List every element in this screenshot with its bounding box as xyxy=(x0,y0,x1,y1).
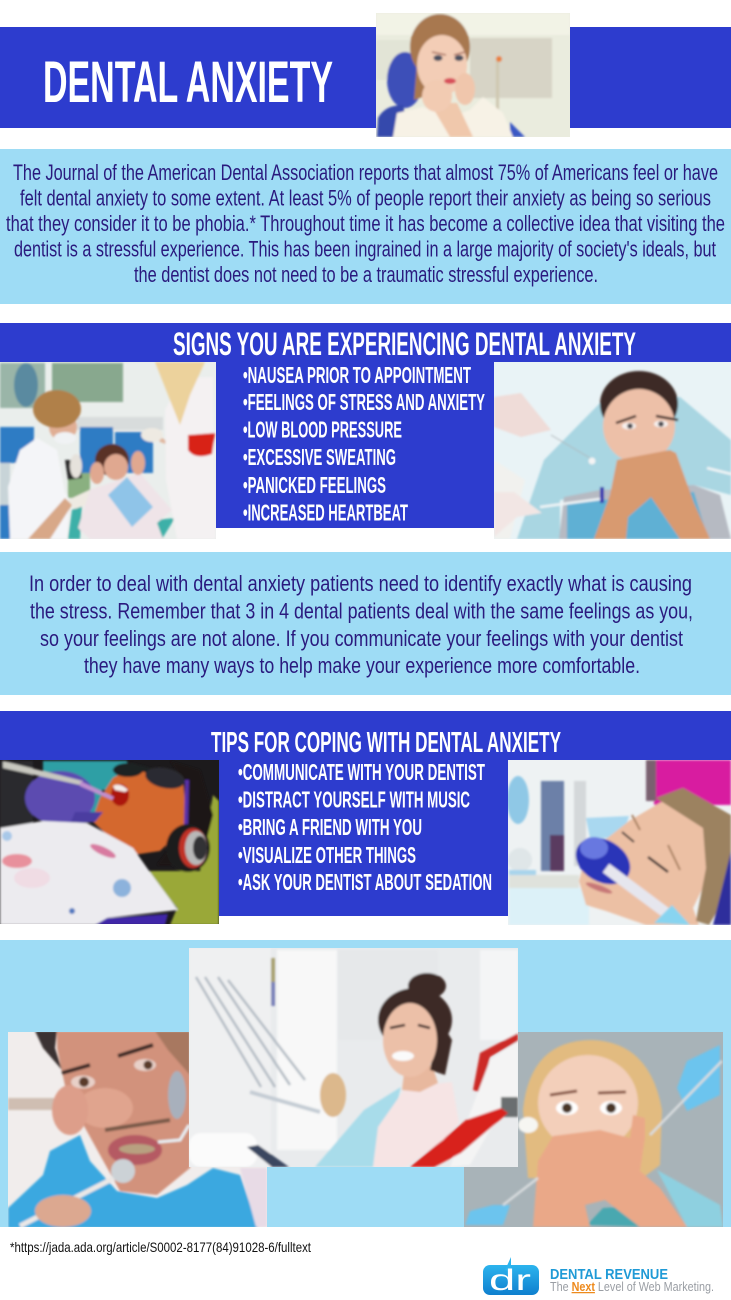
photo: woman covering mouth in dental chair xyxy=(494,362,731,539)
footnote source: *https://jada.ada.org/article/S0002-8177(84)91028-6/fulltext xyxy=(10,1239,311,1255)
panel: intro xyxy=(0,149,731,304)
icon: dr logo mark xyxy=(483,1257,539,1297)
signs list: •PANICKED FEELINGS xyxy=(243,472,386,498)
signs list: •NAUSEA PRIOR TO APPOINTMENT xyxy=(243,362,471,388)
photo: blonde woman covering her mouth xyxy=(464,1032,723,1227)
signs list: •LOW BLOOD PRESSURE xyxy=(243,416,402,442)
tips list: •DISTRACT YOURSELF WITH MUSIC xyxy=(238,786,470,812)
coping paragraph xyxy=(29,571,693,678)
title: DENTAL ANXIETY xyxy=(43,50,333,115)
panel: coping advice xyxy=(0,552,731,695)
tips list xyxy=(238,759,492,895)
tips list: •BRING A FRIEND WITH YOU xyxy=(238,814,422,840)
logo: Dental Revenue xyxy=(483,1257,714,1297)
signs list: •FEELINGS OF STRESS AND ANXIETY xyxy=(243,389,485,415)
photo: child with sunglasses and headphones at dentist xyxy=(0,760,219,925)
signs list: •INCREASED HEARTBEAT xyxy=(243,500,408,526)
tips list: •COMMUNICATE WITH YOUR DENTIST xyxy=(238,759,485,785)
panel: tips xyxy=(0,711,731,916)
photo: frightened patient with dentist and assistant xyxy=(0,362,216,539)
icon: dr logo mark: dr xyxy=(489,1264,531,1297)
photo: smiling woman giving thumbs up xyxy=(189,948,518,1167)
signs list: •EXCESSIVE SWEATING xyxy=(243,444,396,470)
tips list: •ASK YOUR DENTIST ABOUT SEDATION xyxy=(238,869,492,895)
panel: photo collage background xyxy=(0,940,731,1227)
intro paragraph xyxy=(6,160,725,287)
photo: grimacing man with dental mirror xyxy=(8,1031,267,1228)
tips list: •VISUALIZE OTHER THINGS xyxy=(238,842,416,868)
title banner xyxy=(0,27,731,128)
photo: worried woman in dental chair xyxy=(376,13,570,137)
company name: DENTAL REVENUE xyxy=(550,1267,668,1283)
photo: woman with nitrous oxide sedation mask xyxy=(507,760,731,925)
signs list xyxy=(243,362,485,526)
tagline: The Next Level of Web Marketing. xyxy=(550,1280,714,1294)
panel: signs xyxy=(0,323,731,528)
